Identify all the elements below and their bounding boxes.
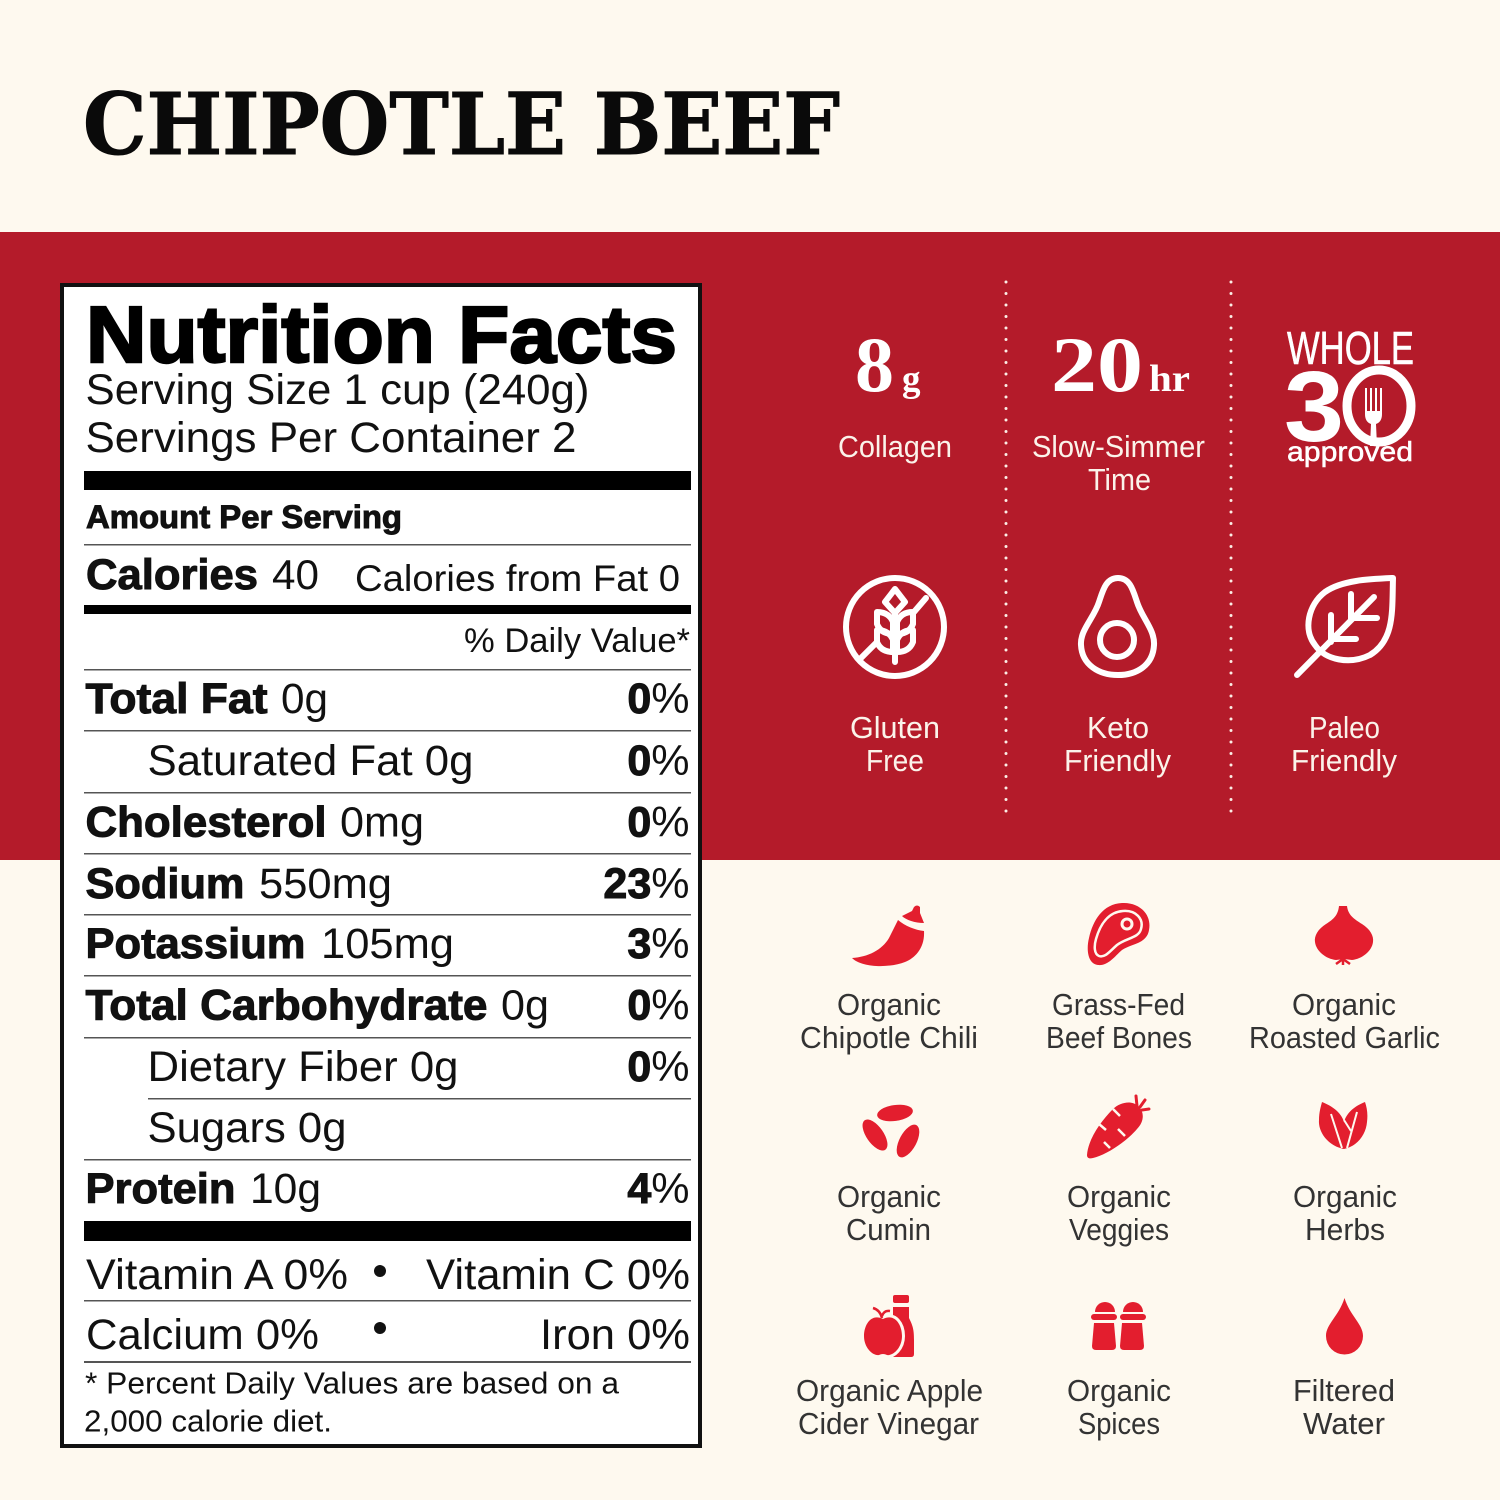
label: roasted garlic: Organic <box>1292 987 1396 1022</box>
label: herbs <box>1293 1179 1397 1247</box>
total fat row: 0% <box>627 675 690 723</box>
dietary fiber row: Dietary Fiber 0g <box>148 1043 458 1091</box>
label: filtered water <box>1293 1373 1395 1441</box>
label: gluten free <box>850 710 940 778</box>
panel: nutrition facts <box>62 285 700 1446</box>
label: keto friendly <box>1064 710 1171 778</box>
label: gluten free: Free <box>866 743 924 778</box>
icon: water drop <box>1326 1298 1363 1354</box>
label: gluten free: Gluten <box>850 710 940 745</box>
calories row: Calories from Fat 0 <box>355 558 680 599</box>
minerals row: Calcium 0% <box>86 1311 319 1359</box>
stat: 8g collagen <box>838 321 952 464</box>
badge: whole30 approved <box>1284 322 1414 467</box>
sodium row <box>86 860 690 908</box>
label: filtered water: Water <box>1303 1406 1385 1441</box>
stat: 8g collagen: Collagen <box>838 429 952 464</box>
dietary fiber row: 0% <box>627 1043 690 1091</box>
sugars row: Sugars 0g <box>148 1104 346 1152</box>
saturated fat row: Saturated Fat 0g <box>148 737 473 785</box>
serving size: Serving Size 1 cup (240g) <box>86 366 590 414</box>
label: cumin: Cumin <box>846 1212 931 1247</box>
label: veggies: Organic <box>1067 1179 1171 1214</box>
icon: spice shakers <box>1091 1302 1146 1350</box>
label: chipotle chili: Chipotle Chili <box>800 1020 978 1055</box>
stat: 20hr slow-simmer: Slow-Simmer <box>1032 429 1205 464</box>
calories row: Calories <box>86 551 258 599</box>
label: herbs: Organic <box>1293 1179 1397 1214</box>
saturated fat row <box>148 737 690 785</box>
badge: whole30 approved: 3 <box>1284 351 1344 463</box>
protein row <box>86 1165 690 1213</box>
servings per container: Servings Per Container 2 <box>86 414 576 462</box>
title: CHIPOTLE BEEF <box>83 75 840 175</box>
label: keto friendly: Keto <box>1087 710 1149 745</box>
label: chipotle chili <box>800 987 978 1055</box>
badge: whole30 approved: WHOLE <box>1287 322 1414 374</box>
stat: 20hr slow-simmer: hr <box>1149 358 1190 400</box>
icon: garlic <box>1315 906 1373 965</box>
label: cumin: Organic <box>837 1179 941 1214</box>
label: apple cider vinegar <box>796 1373 983 1441</box>
label: chipotle chili: Organic <box>837 987 941 1022</box>
amount per serving: Amount Per Serving <box>86 499 402 535</box>
label: cumin <box>837 1179 941 1247</box>
protein row: 4% <box>627 1165 690 1213</box>
icon: apple and vinegar bottle <box>864 1295 914 1357</box>
label: paleo friendly <box>1291 710 1397 778</box>
label: paleo friendly: Paleo <box>1309 710 1380 745</box>
icon: gluten free <box>846 578 944 676</box>
total fat row: 0g <box>281 675 328 723</box>
footnote: 2,000 calorie diet. <box>84 1404 332 1438</box>
label: spices <box>1067 1373 1171 1441</box>
total fat row: Total Fat <box>86 675 268 723</box>
icon: steak <box>1088 903 1149 965</box>
dietary fiber row <box>148 1043 690 1091</box>
stat: 20hr slow-simmer: 20 <box>1051 321 1143 408</box>
dotted dividers <box>1006 282 1231 822</box>
footnote: * Percent Daily Values are based on a <box>85 1366 620 1400</box>
minerals row <box>86 1311 690 1359</box>
icon: carrot <box>1087 1096 1149 1158</box>
label: herbs: Herbs <box>1305 1212 1385 1247</box>
total carbohydrate row <box>86 982 690 1030</box>
sodium row: 23% <box>603 860 690 908</box>
saturated fat row: 0% <box>627 737 690 785</box>
potassium row: 105mg <box>321 920 454 968</box>
icon: herbs <box>1319 1102 1367 1149</box>
label: spices: Spices <box>1078 1406 1160 1441</box>
protein row: 10g <box>250 1165 321 1213</box>
total carbohydrate row: 0% <box>627 982 690 1030</box>
cholesterol row: 0% <box>627 798 690 846</box>
cholesterol row: 0mg <box>340 798 424 846</box>
badge: whole30 approved: approved <box>1287 436 1413 467</box>
vitamins row <box>86 1251 690 1299</box>
label: beef bones <box>1046 987 1192 1055</box>
vitamins row: Vitamin A 0% <box>86 1251 348 1299</box>
label: apple cider vinegar: Cider Vinegar <box>798 1406 979 1441</box>
label: apple cider vinegar: Organic Apple <box>796 1373 983 1408</box>
label: keto friendly: Friendly <box>1064 743 1171 778</box>
daily value header: % Daily Value* <box>464 622 690 660</box>
label: veggies: Veggies <box>1069 1212 1169 1247</box>
footnote <box>84 1366 620 1438</box>
protein row: Protein <box>86 1165 236 1213</box>
cholesterol row: Cholesterol <box>86 798 326 846</box>
potassium row: 3% <box>627 920 690 968</box>
cholesterol row <box>86 798 690 846</box>
minerals row: Iron 0% <box>540 1311 690 1359</box>
total carbohydrate row: Total Carbohydrate <box>86 982 487 1030</box>
icon: chili <box>852 906 924 966</box>
stat: 20hr slow-simmer: Time <box>1088 462 1151 497</box>
stat: 8g collagen: 8 <box>855 321 894 408</box>
potassium row: Potassium <box>86 920 306 968</box>
label: beef bones: Beef Bones <box>1046 1020 1192 1055</box>
label: paleo friendly: Friendly <box>1291 743 1397 778</box>
sodium row: 550mg <box>259 860 392 908</box>
icon: avocado <box>1081 578 1154 675</box>
label: spices: Organic <box>1067 1373 1171 1408</box>
calories row: 40 <box>272 551 319 598</box>
total fat row <box>86 675 690 723</box>
sodium row: Sodium <box>86 860 244 908</box>
vitamins row: Vitamin C 0% <box>426 1251 690 1299</box>
potassium row <box>86 920 690 968</box>
label: veggies <box>1067 1179 1171 1247</box>
nutrition heading: Nutrition Facts <box>86 290 677 379</box>
stat: 20hr slow-simmer <box>1032 321 1205 497</box>
label: roasted garlic <box>1249 987 1440 1055</box>
stat: 8g collagen: g <box>902 359 921 400</box>
icon: leaf <box>1297 578 1393 675</box>
label: roasted garlic: Roasted Garlic <box>1249 1020 1440 1055</box>
label: beef bones: Grass-Fed <box>1052 987 1185 1022</box>
red band <box>0 232 1500 860</box>
icon: cumin <box>858 1103 924 1161</box>
total carbohydrate row: 0g <box>501 982 549 1030</box>
label: filtered water: Filtered <box>1293 1373 1395 1408</box>
calories row <box>86 551 680 599</box>
